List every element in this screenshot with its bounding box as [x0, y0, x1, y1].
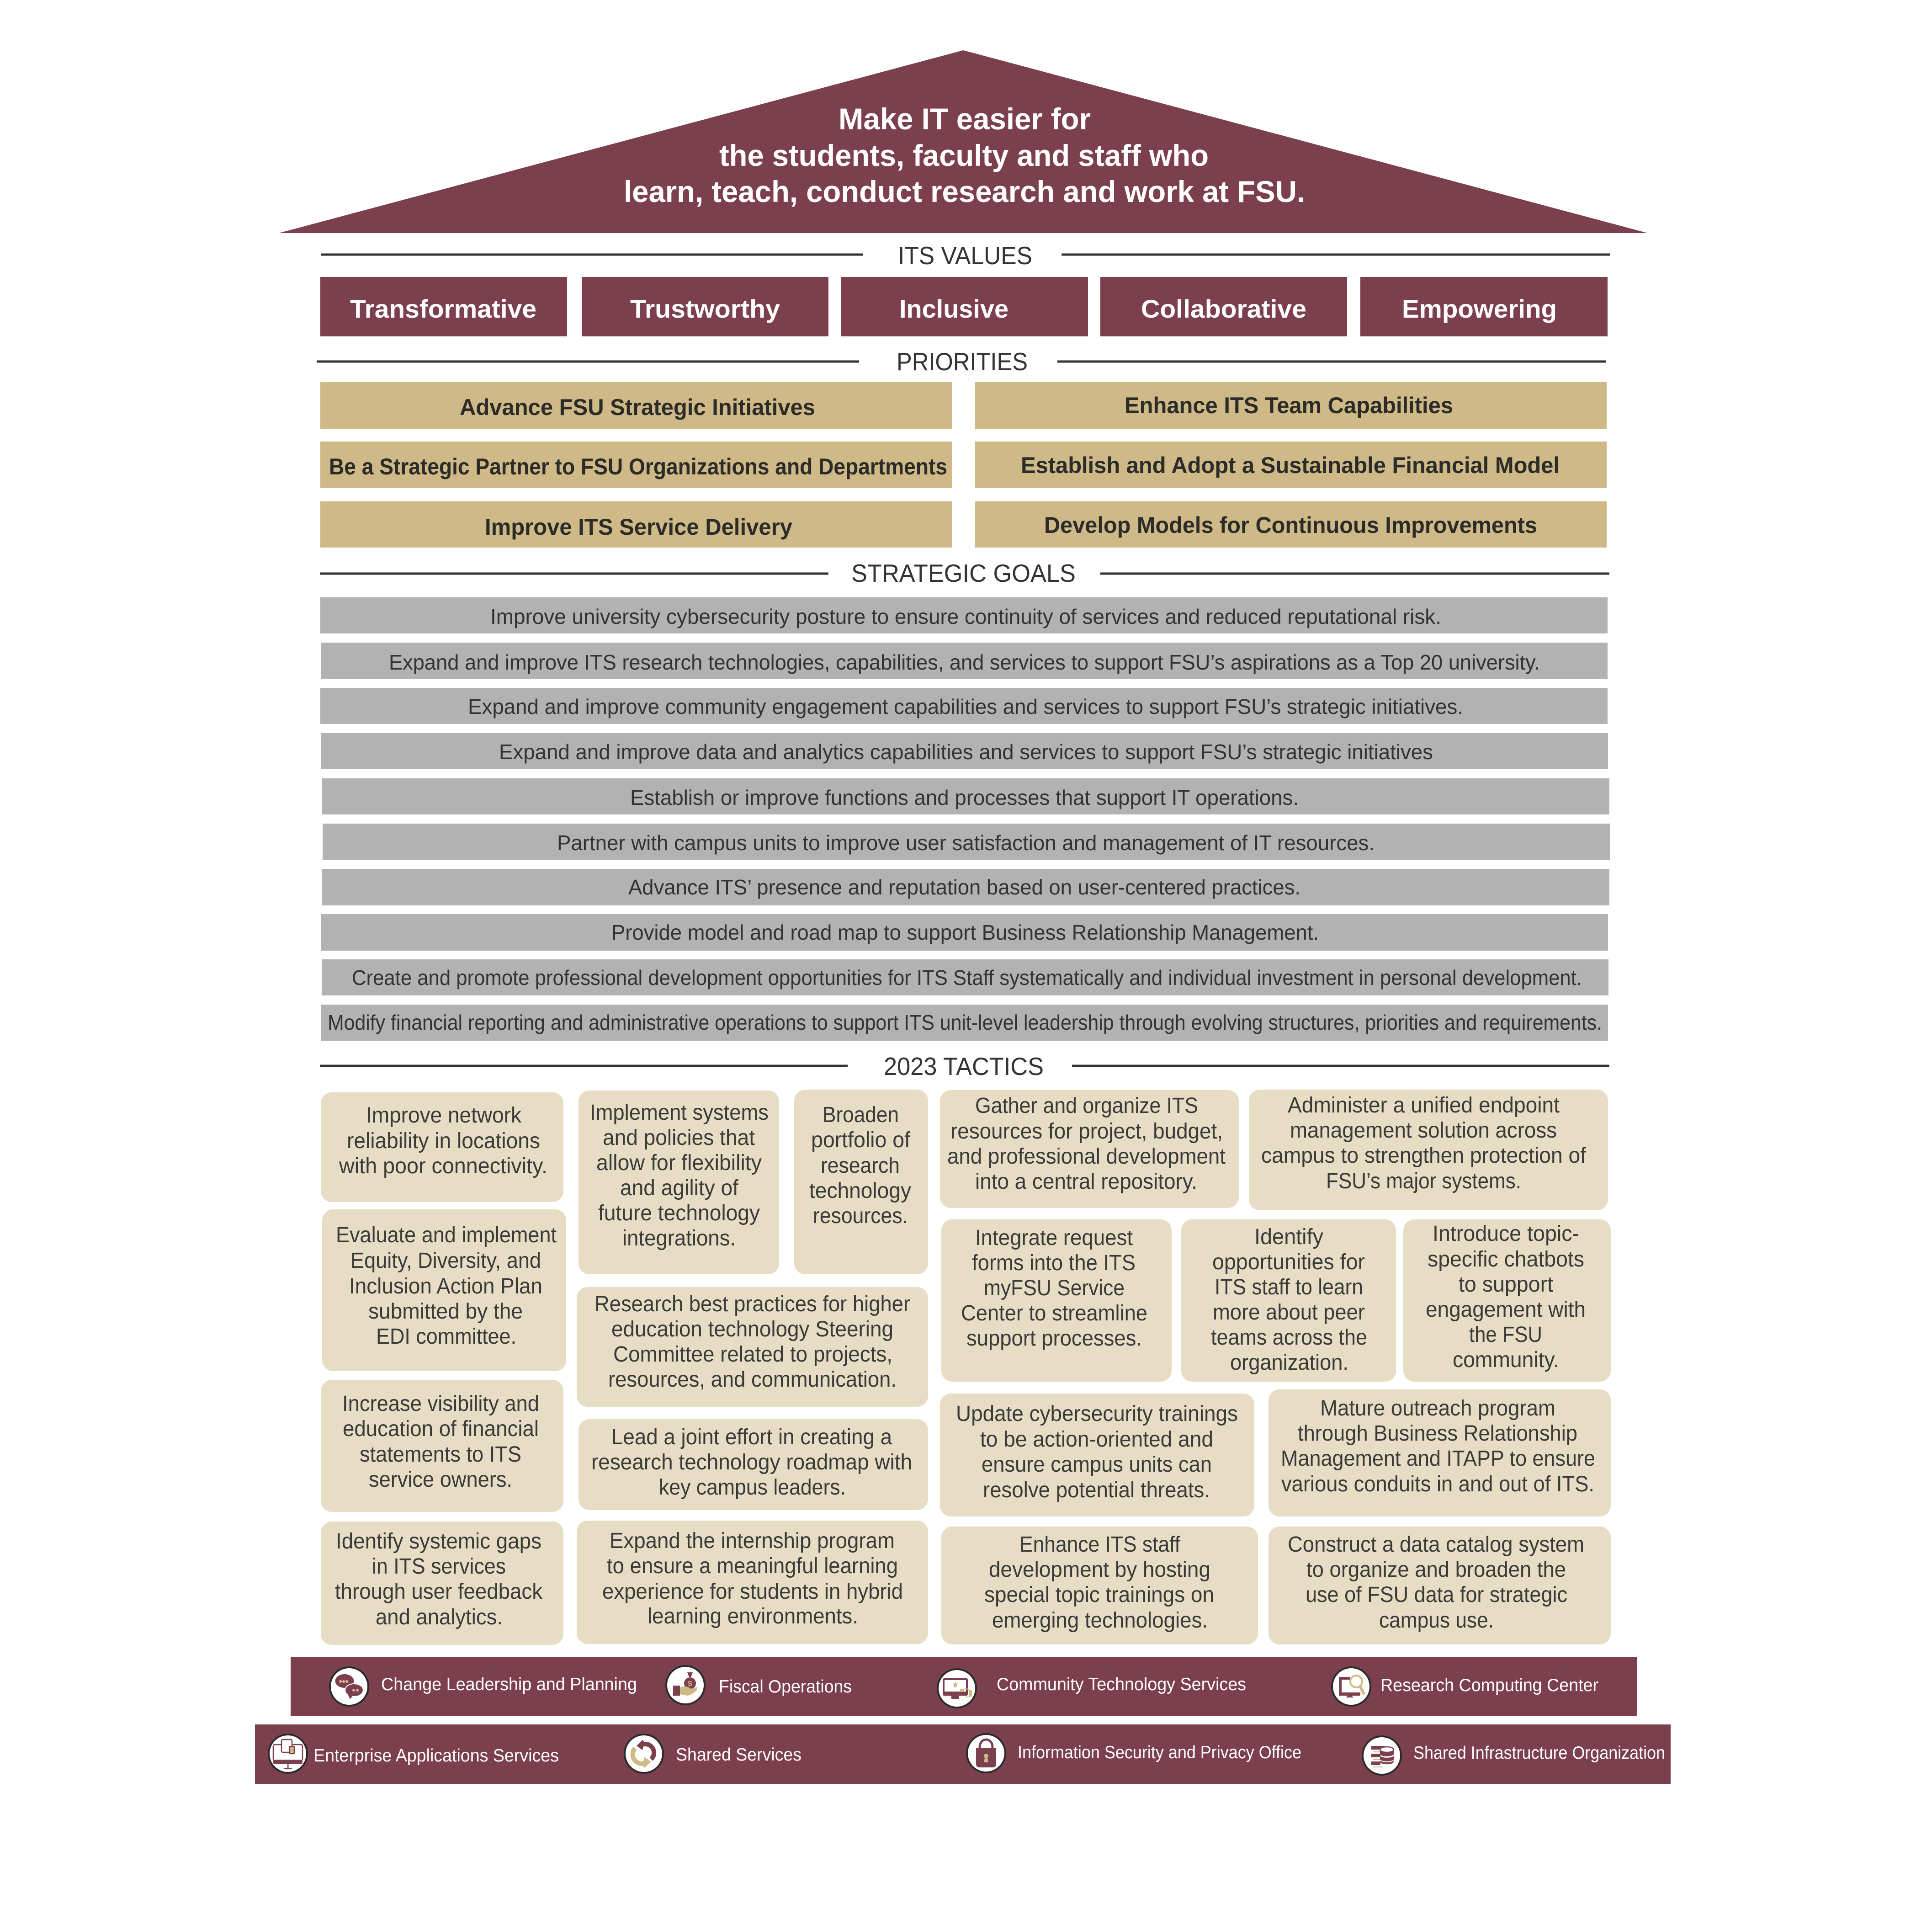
tactic: staff development: development by hosting: [989, 1558, 1210, 1582]
goal 4: [321, 733, 1608, 769]
tactic: central repository: into a central repository.: [975, 1170, 1197, 1194]
value: Empowering: Empowering: [1402, 294, 1557, 323]
tactic: research portfolio: research: [821, 1154, 900, 1178]
heading: strategic goals: STRATEGIC GOALS: [851, 559, 1076, 587]
tactic: systems and policies: future technology: [598, 1201, 760, 1225]
tactic: financial statements: service owners.: [369, 1468, 512, 1492]
tactic: outreach program: Mature outreach program: [1320, 1396, 1555, 1421]
goal 8: Provide model and road map to support Business Relationship Management.: [611, 920, 1319, 944]
icon: chat bubbles: [330, 1667, 368, 1706]
goal 4: Expand and improve data and analytics capabilities and services to support FSU’s strategic initiatives: [499, 740, 1433, 764]
tactic: cybersecurity trainings: ensure campus units can: [982, 1452, 1212, 1477]
tactic: staff development: Enhance ITS staff: [1019, 1532, 1181, 1557]
tactic: financial statements: [321, 1380, 563, 1512]
goal 1: [320, 597, 1608, 633]
tactic: unified endpoint management: [1249, 1090, 1608, 1210]
tactic: network reliability: with poor connectivity.: [339, 1154, 547, 1178]
tactic: best practices: [577, 1287, 928, 1407]
tactic: systems and policies: and agility of: [620, 1176, 739, 1200]
tactic: EDI action plan: Inclusion Action Plan: [349, 1274, 542, 1298]
tactic: research roadmap: Lead a joint effort in creating a: [611, 1425, 892, 1449]
icon: money bag in hand: [666, 1666, 705, 1704]
tactic: chatbots: to support: [1459, 1272, 1553, 1297]
value: Empowering: [1360, 277, 1608, 336]
tactic: unified endpoint management: FSU’s major systems.: [1326, 1169, 1521, 1193]
priority: Strategic Partner: [320, 442, 952, 488]
goal 7: Advance ITS’ presence and reputation based on user-centered practices.: [628, 875, 1300, 899]
tactic: unified endpoint management: Administer a unified endpoint: [1288, 1093, 1560, 1117]
tactic: data catalog: Construct a data catalog system: [1288, 1532, 1584, 1557]
tactic: EDI action plan: Equity, Diversity, and: [350, 1249, 541, 1273]
tactic: systemic gaps: in ITS services: [372, 1554, 506, 1579]
mission statement text: the students, faculty and staff who: [719, 138, 1209, 172]
mission statement text: [624, 102, 1305, 208]
tactic: research portfolio: technology: [809, 1179, 911, 1203]
tactic: research roadmap: key campus leaders.: [659, 1475, 846, 1500]
tactic: staff development: emerging technologies.: [992, 1608, 1208, 1633]
tactic: request forms: forms into the ITS: [972, 1251, 1136, 1275]
tactic: internship program: to ensure a meaningful learning: [607, 1554, 898, 1578]
goal 10: [321, 1005, 1608, 1041]
tactic: peer teams: ITS staff to learn: [1215, 1275, 1363, 1299]
tactic: financial statements: statements to ITS: [360, 1442, 521, 1467]
value: Trustworthy: [582, 277, 828, 336]
priority: Advance FSU Strategic Initiatives: Advance FSU Strategic Initiatives: [460, 394, 815, 420]
icon: padlock: [967, 1734, 1005, 1772]
panel: priorities: [320, 382, 1607, 548]
icon: money bag in hand: S: [688, 1680, 693, 1688]
tactic: chatbots: [1403, 1219, 1611, 1382]
goal 6: Partner with campus units to improve user satisfaction and management of IT resources.: [557, 831, 1375, 855]
tactic: outreach program: [1269, 1389, 1611, 1516]
tactic: cybersecurity trainings: to be action-oriented and: [980, 1427, 1213, 1452]
panel: 2023 tactics: [321, 1090, 1611, 1645]
goal 10: Modify financial reporting and administrative operations to support ITS unit-level leadership through evolving structures, priorities and requirements.: [328, 1011, 1602, 1034]
tactic: cybersecurity trainings: [940, 1394, 1254, 1516]
tactic: internship program: [577, 1521, 928, 1644]
priority: Improve ITS Service Delivery: Improve ITS Service Delivery: [485, 514, 792, 540]
tactic: chatbots: engagement with: [1426, 1298, 1586, 1322]
priority: Sustainable Financial Model: Establish and Adopt a Sustainable Financial Model: [1021, 452, 1560, 478]
foundation bar: second row of units: [255, 1724, 1671, 1784]
tactic: peer teams: more about peer: [1213, 1300, 1365, 1325]
priority: Strategic Partner: Be a Strategic Partner to FSU Organizations and Departments: [329, 454, 947, 479]
tactic: research roadmap: research technology roadmap with: [591, 1450, 912, 1474]
label: Information Security and Privacy Office: Information Security and Privacy Office: [1018, 1743, 1301, 1762]
value: Transformative: Transformative: [350, 294, 536, 323]
tactic: peer teams: opportunities for: [1212, 1250, 1365, 1274]
priority: Advance FSU Strategic Initiatives: [320, 382, 952, 429]
heading: priorities: PRIORITIES: [897, 347, 1028, 376]
icon: circular arrows: [625, 1734, 663, 1773]
tactic: research portfolio: resources.: [813, 1204, 908, 1228]
tactic: EDI action plan: [322, 1209, 566, 1371]
tactic: internship program: learning environments.: [648, 1604, 858, 1628]
value: Trustworthy: Trustworthy: [630, 294, 780, 323]
tactic: data catalog: [1269, 1527, 1611, 1644]
heading: ITS values: ITS VALUES: [898, 241, 1032, 270]
value: Transformative: [320, 277, 567, 336]
goal 7: [322, 869, 1609, 905]
tactic: peer teams: teams across the: [1211, 1325, 1367, 1350]
tactic: request forms: myFSU Service: [984, 1276, 1125, 1300]
priority: Enhance ITS Team Capabilities: Enhance ITS Team Capabilities: [1125, 393, 1453, 418]
foundation bar: first row of units: [291, 1657, 1637, 1716]
goal 9: [322, 959, 1608, 995]
value: Inclusive: Inclusive: [899, 294, 1008, 323]
tactic: unified endpoint management: campus to strengthen protection of: [1261, 1144, 1587, 1168]
tactic: central repository: [940, 1090, 1239, 1208]
tactic: best practices: resources, and communication.: [608, 1367, 897, 1392]
tactic: network reliability: [321, 1092, 563, 1202]
goal 9: Create and promote professional development opportunities for ITS Staff systematically and individual investment in personal development.: [352, 966, 1582, 990]
tactic: network reliability: reliability in locations: [347, 1129, 540, 1153]
tactic: central repository: and professional development: [947, 1144, 1226, 1169]
priority: Enhance ITS Team Capabilities: [975, 382, 1607, 429]
tactic: request forms: [941, 1219, 1172, 1382]
goal 2: Expand and improve ITS research technologies, capabilities, and services to support FSU’s aspirations as a Top 20 university.: [389, 650, 1540, 674]
tactic: chatbots: specific chatbots: [1428, 1247, 1584, 1272]
tactic: peer teams: [1181, 1219, 1396, 1382]
tactic: cybersecurity trainings: resolve potential threats.: [983, 1478, 1210, 1502]
goal 1: Improve university cybersecurity posture to ensure continuity of services and reduced reputational risk.: [490, 605, 1441, 628]
tactic: network reliability: Improve network: [366, 1103, 522, 1128]
tactic: request forms: Integrate request: [975, 1226, 1133, 1250]
goal 6: [323, 824, 1610, 860]
heading: 2023 tactics: 2023 TACTICS: [884, 1052, 1044, 1080]
icon: monitor with wrench and headset: [938, 1669, 976, 1708]
priority: Continuous Improvements: Develop Models for Continuous Improvements: [1044, 512, 1537, 538]
tactic: data catalog: to organize and broaden the: [1306, 1558, 1566, 1582]
panel: strategic goals: [320, 597, 1610, 1041]
tactic: outreach program: Management and ITAPP to ensure: [1281, 1447, 1595, 1471]
tactic: systemic gaps: Identify systemic gaps: [336, 1529, 541, 1554]
goal 3: [320, 688, 1608, 724]
priority: Sustainable Financial Model: [975, 442, 1607, 488]
mission statement text: Make IT easier for: [839, 102, 1091, 136]
tactic: staff development: [941, 1527, 1258, 1644]
tactic: outreach program: various conduits in and out of ITS.: [1281, 1472, 1594, 1496]
label: Fiscal Operations: Fiscal Operations: [719, 1677, 852, 1697]
tactic: central repository: Gather and organize ITS: [975, 1094, 1198, 1118]
tactic: staff development: special topic trainings on: [984, 1583, 1214, 1607]
tactic: systems and policies: integrations.: [622, 1226, 736, 1250]
tactic: systems and policies: [579, 1091, 779, 1274]
label: Enterprise Applications Services: Enterprise Applications Services: [313, 1746, 559, 1766]
tactic: systems and policies: Implement systems: [590, 1101, 769, 1125]
value: Inclusive: [841, 277, 1088, 336]
goal 5: [322, 778, 1609, 814]
icon: monitor with magnifier: [1332, 1667, 1370, 1706]
panel: ITS values: [320, 277, 1608, 336]
goal 8: [321, 914, 1608, 951]
tactic: research roadmap: [579, 1419, 928, 1510]
priority: Continuous Improvements: [975, 501, 1607, 548]
tactic: financial statements: Increase visibility and: [342, 1392, 539, 1416]
icon: servers and database: [1363, 1736, 1401, 1775]
label: Research Computing Center: Research Computing Center: [1380, 1676, 1598, 1695]
tactic: chatbots: Introduce topic-: [1433, 1222, 1579, 1246]
priority: Improve ITS Service Delivery: [320, 501, 952, 548]
value: Collaborative: Collaborative: [1141, 294, 1306, 323]
goal 3: Expand and improve community engagement capabilities and services to support FSU’s strategic initiatives.: [468, 695, 1463, 718]
label: Shared Infrastructure Organization: Shared Infrastructure Organization: [1413, 1743, 1665, 1763]
tactic: cybersecurity trainings: Update cybersecurity trainings: [956, 1402, 1238, 1426]
tactic: best practices: Committee related to projects,: [613, 1342, 892, 1367]
tactic: systemic gaps: through user feedback: [335, 1580, 543, 1604]
tactic: central repository: resources for project, budget,: [950, 1119, 1223, 1144]
tactic: internship program: experience for students in hybrid: [602, 1580, 903, 1604]
tactic: systemic gaps: and analytics.: [376, 1605, 503, 1629]
label: Change Leadership and Planning: Change Leadership and Planning: [381, 1675, 637, 1694]
value: Collaborative: [1100, 277, 1347, 336]
tactic: unified endpoint management: management solution across: [1290, 1118, 1557, 1143]
tactic: best practices: education technology Steering: [611, 1317, 893, 1341]
tactic: financial statements: education of financial: [343, 1417, 539, 1441]
label: Community Technology Services: Community Technology Services: [997, 1675, 1246, 1694]
goal 5: Establish or improve functions and processes that support IT operations.: [630, 786, 1299, 809]
tactic: peer teams: organization.: [1230, 1351, 1348, 1375]
tactic: systems and policies: allow for flexibility: [596, 1151, 762, 1175]
tactic: outreach program: through Business Relationship: [1298, 1421, 1577, 1446]
tactic: EDI action plan: Evaluate and implement: [336, 1223, 557, 1247]
tactic: best practices: Research best practices for higher: [594, 1292, 910, 1316]
tactic: research portfolio: portfolio of: [811, 1128, 911, 1152]
tactic: request forms: Center to streamline: [961, 1301, 1147, 1325]
roof with mission statement: [279, 50, 1648, 233]
tactic: EDI action plan: EDI committee.: [376, 1325, 516, 1349]
icon: enterprise devices: [269, 1734, 307, 1773]
tactic: systemic gaps: [321, 1522, 563, 1645]
tactic: peer teams: Identify: [1254, 1225, 1323, 1249]
goal 2: [321, 643, 1608, 679]
tactic: systems and policies: and policies that: [603, 1126, 755, 1150]
tactic: request forms: support processes.: [966, 1326, 1142, 1351]
mission statement text: learn, teach, conduct research and work at FSU.: [624, 175, 1305, 208]
tactic: chatbots: community.: [1453, 1348, 1559, 1372]
tactic: chatbots: the FSU: [1469, 1323, 1542, 1347]
tactic: EDI action plan: submitted by the: [368, 1299, 523, 1324]
tactic: research portfolio: Broaden: [823, 1103, 899, 1127]
tactic: research portfolio: [794, 1090, 928, 1274]
tactic: data catalog: campus use.: [1379, 1608, 1494, 1633]
tactic: internship program: Expand the internship program: [610, 1529, 895, 1553]
label: Shared Services: Shared Services: [676, 1745, 801, 1765]
tactic: data catalog: use of FSU data for strategic: [1306, 1583, 1567, 1607]
